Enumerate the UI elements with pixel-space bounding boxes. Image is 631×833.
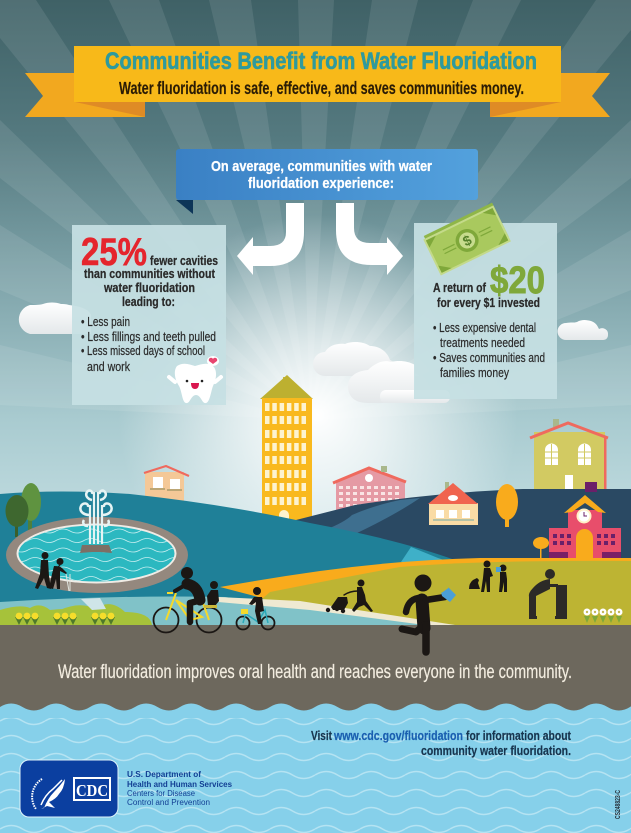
building: olive house xyxy=(530,419,608,492)
cavities bullet list: • Less fillings and teeth pulled xyxy=(81,329,216,344)
bushes xyxy=(0,604,152,625)
publication code: CS248823-C xyxy=(615,790,622,819)
hill: olive field xyxy=(262,561,631,625)
trees: left pair xyxy=(6,483,41,537)
return bullet list: families money xyxy=(440,365,509,380)
cavities bullet list: • Less pain xyxy=(81,314,130,329)
visit information xyxy=(311,728,572,758)
icon: smiling tooth xyxy=(169,356,221,403)
sky background xyxy=(0,0,631,560)
cavities text: fewer cavities xyxy=(150,254,218,268)
building: peach house xyxy=(144,466,189,506)
road xyxy=(0,625,631,715)
cavities text: than communities without xyxy=(84,267,216,281)
tree: small orange xyxy=(533,537,549,559)
hill: light blue patch xyxy=(401,547,450,562)
clouds centre xyxy=(313,342,450,403)
water footer xyxy=(0,704,631,833)
panel: fewer cavities xyxy=(72,225,226,405)
blue callout heading: On average, communities with water xyxy=(211,158,432,175)
agency text xyxy=(127,770,233,807)
CDC mark: CDC xyxy=(76,781,108,800)
icon: dollar bills xyxy=(422,203,511,276)
return bullet list xyxy=(433,320,545,380)
building: school with clock xyxy=(549,482,621,558)
cavities text xyxy=(84,254,218,309)
people: couple by fountain xyxy=(35,552,70,591)
ribbon title banner xyxy=(25,46,610,117)
blue callout heading xyxy=(176,149,478,214)
agency text: Centers for Disease xyxy=(127,789,196,798)
CDC logo xyxy=(20,760,118,817)
visit information: community water fluoridation. xyxy=(421,743,571,758)
25 percent stat: 25% xyxy=(81,231,147,274)
hill: light streak xyxy=(325,498,420,534)
title: Communities Benefit from Water Fluoridation xyxy=(105,48,537,75)
people: runner with water bottle xyxy=(402,574,456,652)
tree: orange xyxy=(496,484,518,527)
cloud right small xyxy=(558,320,608,340)
arrow left xyxy=(237,203,304,275)
panel: return on investment xyxy=(414,203,557,399)
return text: A return of xyxy=(433,281,487,295)
people: woman with stroller xyxy=(326,580,373,613)
visit information: www.cdc.gov/fluoridation xyxy=(333,728,463,743)
flowers: white daisies xyxy=(584,608,622,623)
hill: teal main xyxy=(0,492,470,630)
agency text: U.S. Department of xyxy=(127,770,201,779)
return text: for every $1 invested xyxy=(437,296,540,310)
ribbon main band xyxy=(74,46,561,102)
return bullet list: treatments needed xyxy=(440,335,525,350)
agency text: Health and Human Services xyxy=(127,780,233,789)
hill: dark navy xyxy=(296,489,631,565)
cavities text: water fluoridation xyxy=(103,281,195,295)
fountain base xyxy=(80,545,112,553)
ground strip left xyxy=(0,597,470,630)
people: group with dog xyxy=(469,560,507,592)
cavities bullet list: • Less missed days of school xyxy=(81,343,205,358)
visit information: for information about xyxy=(466,728,572,743)
cavities bullet list xyxy=(81,314,216,374)
building: small cream house xyxy=(428,482,478,525)
people: child on bicycle xyxy=(236,587,274,630)
fountain jets xyxy=(80,491,112,544)
visit information: Visit xyxy=(311,728,333,743)
light path patch xyxy=(81,598,106,610)
20 dollars stat: $20 xyxy=(490,260,545,302)
blue callout heading: fluoridation experience: xyxy=(248,175,394,192)
fountain pool xyxy=(6,491,188,593)
building: pink apartment xyxy=(333,466,406,515)
agency text: Control and Prevention xyxy=(127,798,210,807)
cavities bullet list: and work xyxy=(87,359,130,374)
icon: dollar bills: $ xyxy=(460,231,474,249)
return text xyxy=(433,281,540,310)
ribbon tails xyxy=(25,73,610,117)
return bullet list: • Saves communities and xyxy=(433,350,545,365)
arrow right xyxy=(336,203,403,275)
hill: orange band xyxy=(220,558,631,600)
flowers: yellow tulips xyxy=(15,613,115,625)
cavities text: leading to: xyxy=(122,295,175,309)
building: yellow tower xyxy=(260,375,313,520)
people: man at drinking fountain xyxy=(529,569,567,619)
return bullet list: • Less expensive dental xyxy=(433,320,536,335)
cloud left xyxy=(19,302,91,334)
people: cyclist with child xyxy=(154,567,222,632)
icon: HHS eagle xyxy=(32,779,65,809)
beige path xyxy=(218,597,455,625)
